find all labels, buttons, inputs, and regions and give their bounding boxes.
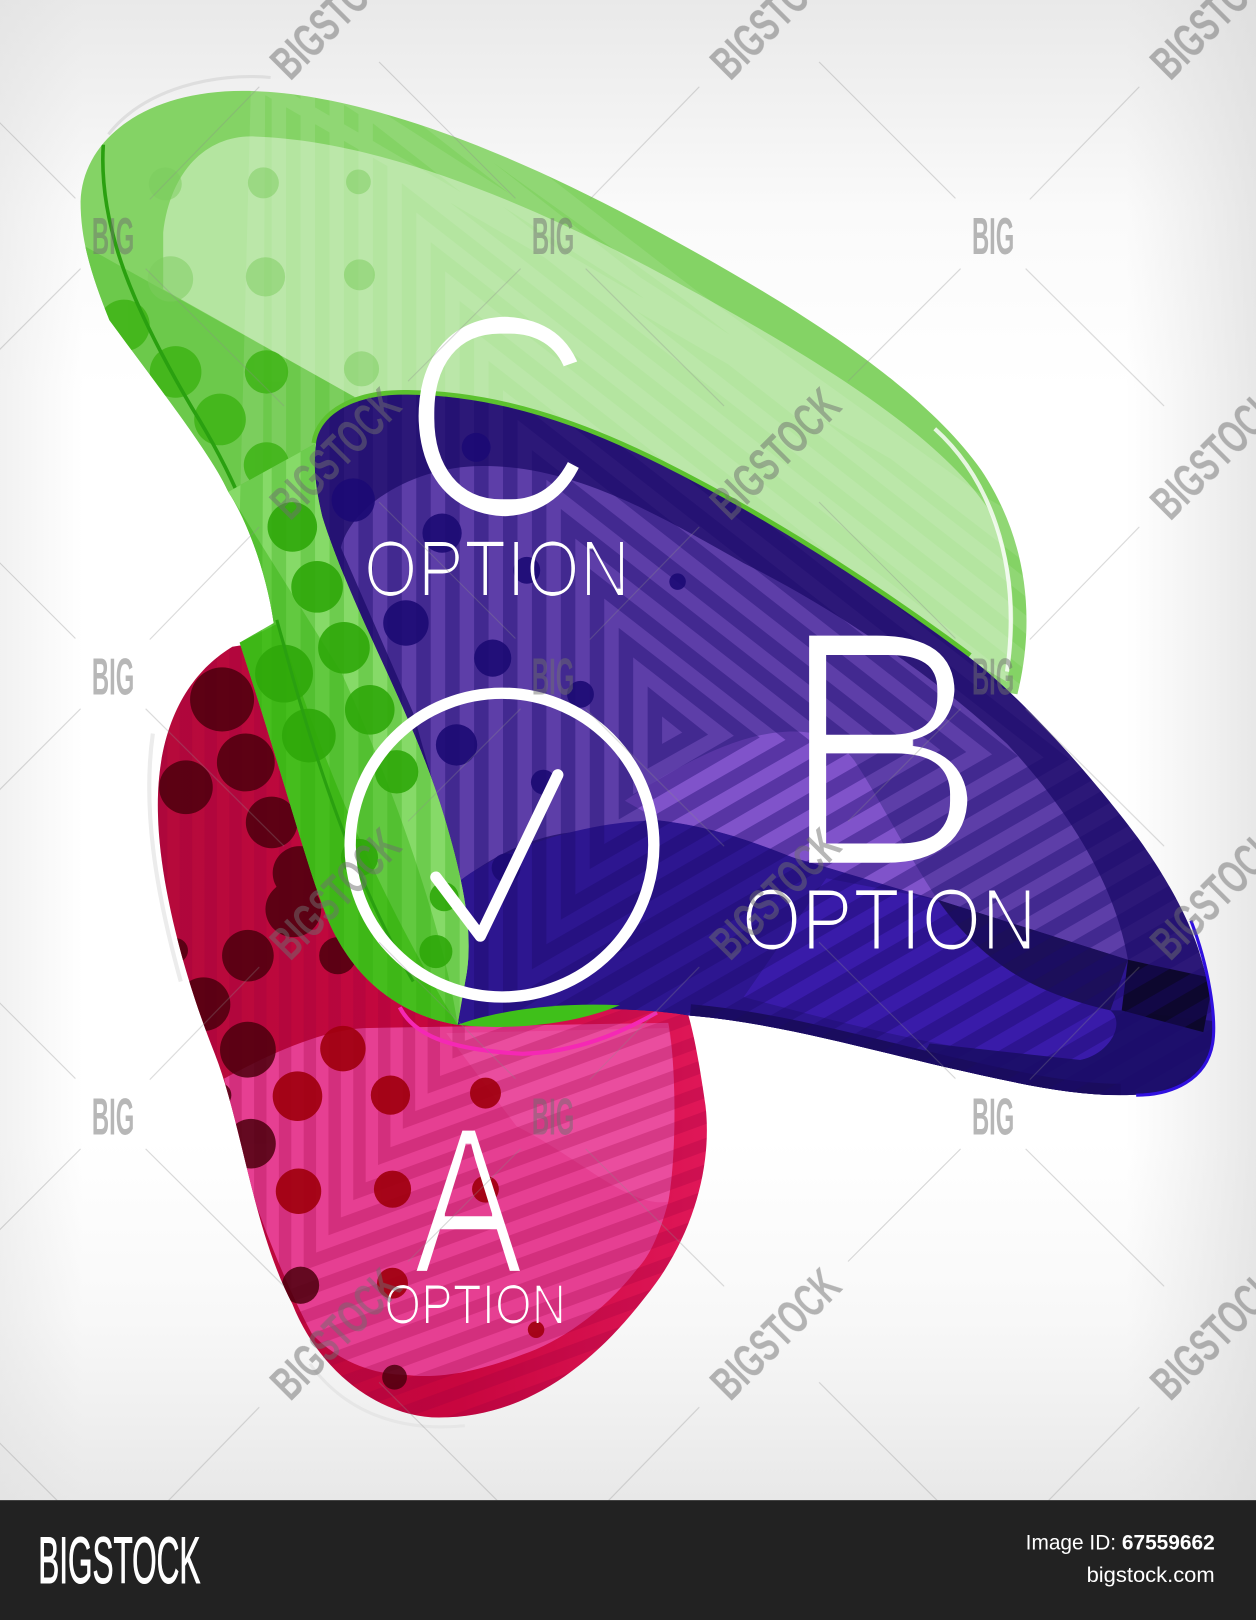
halftone dots dark bbox=[159, 667, 407, 1390]
watermark text: BIGSTOCK bbox=[261, 819, 411, 970]
icon: check mark in circle bbox=[350, 693, 654, 997]
black tip band bbox=[1122, 960, 1214, 1032]
dark streak bbox=[101, 144, 237, 489]
light purple inner region bbox=[341, 466, 1128, 960]
option C label bbox=[364, 255, 630, 613]
bright sliver below purple bbox=[458, 1005, 620, 1027]
panel: shape A (red option) bbox=[158, 646, 707, 1418]
watermark text: BIG bbox=[972, 1087, 1014, 1145]
panel: shape C (green option body) bbox=[80, 90, 1026, 694]
watermark text: BIGSTOCK bbox=[701, 1259, 851, 1410]
word OPTION under A: OPTION bbox=[384, 1273, 566, 1335]
letter C: C bbox=[400, 255, 596, 578]
mid green lower region bbox=[81, 244, 354, 641]
bottom rim bbox=[690, 1016, 1121, 1095]
watermark text: BIGSTOCK bbox=[261, 379, 411, 530]
watermark text: BIG bbox=[972, 647, 1014, 705]
option A label bbox=[384, 1085, 566, 1335]
option B label bbox=[742, 560, 1037, 968]
watermark text: BIG bbox=[92, 207, 134, 265]
strong green dots bbox=[98, 300, 289, 488]
footer bar: BIGSTOCK bbox=[38, 1524, 200, 1598]
letter A: A bbox=[413, 1085, 524, 1316]
dark wedge bbox=[938, 900, 1128, 1010]
limb dots bbox=[255, 502, 459, 968]
panel: green limb overlapping purple bbox=[228, 444, 620, 1027]
watermark text: BIGSTOCK bbox=[261, 1259, 411, 1410]
watermark text: BIG bbox=[972, 207, 1014, 265]
watermark text: BIG bbox=[532, 647, 574, 705]
chevron stripes bbox=[158, 646, 707, 1418]
magenta arc bbox=[400, 1007, 657, 1054]
watermark text: BIGSTOCK bbox=[701, 379, 851, 530]
blue inner bbox=[744, 878, 1116, 1060]
lavender band bbox=[625, 731, 938, 900]
watermark text: BIG bbox=[532, 207, 574, 265]
watermark text: BIG bbox=[532, 1087, 574, 1145]
limb streak bbox=[277, 620, 413, 982]
panel: shape B (purple option) bbox=[314, 394, 1216, 1097]
pink inner region bbox=[224, 1023, 674, 1376]
watermark text: BIG bbox=[92, 647, 134, 705]
dark lower region bbox=[458, 820, 1229, 1111]
letter B: B bbox=[776, 560, 991, 939]
word OPTION under B: OPTION bbox=[742, 871, 1037, 968]
word OPTION under C: OPTION bbox=[364, 524, 630, 613]
dark lower right bbox=[920, 1010, 1212, 1096]
purple dots bbox=[332, 433, 686, 882]
light inner panel bbox=[163, 136, 1013, 682]
image id: Image ID: 67559662 bbox=[1026, 1530, 1215, 1555]
watermark text: BIG bbox=[92, 1087, 134, 1145]
concentric triangle stripes bbox=[314, 394, 1212, 1095]
white edge highlight bbox=[935, 429, 1011, 672]
website: bigstock.com bbox=[1087, 1562, 1215, 1587]
halftone dots red bbox=[273, 1026, 544, 1338]
watermark text: BIGSTOCK bbox=[701, 819, 851, 970]
footer bar bbox=[0, 1500, 1256, 1620]
bright rim bbox=[316, 395, 969, 657]
faint green dots bbox=[148, 167, 379, 386]
blue edge bbox=[1136, 921, 1214, 1095]
